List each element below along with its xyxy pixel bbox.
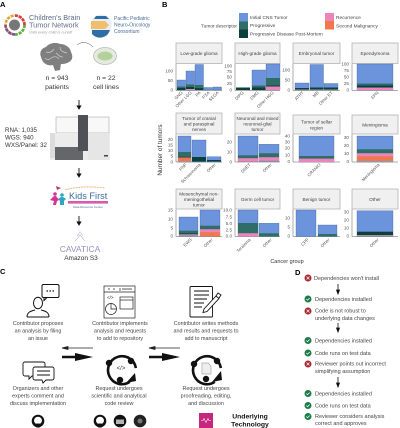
item: code runs on test data: Code runs on test data	[315, 351, 372, 357]
chart: embryonal tumor: 100	[282, 68, 290, 72]
chart: benign tumor	[285, 189, 340, 248]
icon: github 2	[94, 415, 106, 428]
chart: germ cell tumor: 0.0	[226, 234, 232, 239]
panel C: contribution workflow	[0, 267, 269, 428]
chart: germ cell tumor: Other	[262, 237, 273, 248]
panel letter C: C	[0, 267, 6, 276]
chart: low-grade glioma: Low-grade glioma	[180, 51, 218, 56]
chart: meningioma: 10	[344, 151, 349, 156]
chart: neuronal and mixed neuronal-glial tumor	[227, 113, 280, 174]
chart: tumor of cranial and paraspinal nerves	[168, 113, 222, 184]
logo: Children's Brain Tumor Network: Children's Brain	[29, 13, 80, 22]
chart: meningioma: 30	[344, 135, 349, 140]
chart: benign tumor: 10	[285, 215, 290, 220]
chart: high-grade glioma: DMG	[249, 90, 260, 101]
chart: high-grade glioma: 0	[229, 88, 232, 92]
chart: germ cell tumor: Germ cell tumor	[241, 197, 275, 202]
text: contributor writes: and results and requests to	[173, 328, 239, 334]
text: code review: scientific and analytical	[91, 394, 147, 400]
item: dependencies installed	[304, 390, 372, 398]
chart: tumor of cranial and paraspinal nerves: and paraspinal	[184, 122, 214, 126]
item: code runs on test data: Code runs on test data	[315, 403, 372, 409]
text: contributor writes: Contributor writes methods	[174, 321, 239, 327]
chart: high-grade glioma: 50	[227, 74, 232, 80]
arrow	[336, 377, 340, 387]
chart: mesenchymal non-meningothelial tumor: tumor	[193, 202, 205, 208]
legend	[201, 13, 378, 38]
sequencing counts: WGS: 940	[5, 134, 34, 142]
chart: other: 30	[344, 209, 349, 214]
text: code review	[91, 386, 147, 407]
text: contributor implements	[92, 321, 148, 342]
text: organizers comment: Organizers and other	[13, 386, 64, 392]
chart: other	[344, 189, 398, 248]
logo: Children's Brain Tumor Network: Until every child is cured!	[29, 30, 73, 34]
text: organizers comment	[10, 386, 66, 407]
chart: ependymoma: EPN	[370, 90, 380, 100]
chart: germ cell tumor: 10.0	[223, 208, 232, 213]
item: dependencies installed: Dependencies installed	[315, 297, 372, 303]
chart: tumor of sellar region: 0	[287, 159, 290, 164]
chart: benign tumor: Other	[320, 237, 331, 248]
chart: neuronal and mixed neuronal-glial tumor: DNET	[240, 162, 252, 174]
chart: germ cell tumor: 7.5	[226, 215, 232, 220]
arrow	[336, 284, 340, 294]
panel letter D: D	[295, 268, 301, 277]
chart: low-grade glioma: 0	[170, 88, 173, 92]
text: proofreading: Request undergoes	[182, 386, 230, 392]
chart: low-grade glioma: PXA	[201, 90, 211, 100]
item: dependencies installed	[304, 296, 372, 303]
text: underlying technology	[231, 414, 269, 428]
chart: tumor of sellar region: 30	[285, 140, 290, 145]
text: underlying technology: Underlying	[232, 414, 268, 420]
logo: Cavatica	[60, 232, 101, 262]
chart: mesenchymal non-meningothelial tumor: 0	[170, 234, 173, 239]
panel B: tumor bar charts	[157, 0, 398, 265]
text: contributor proposes: Contributor proposes	[13, 321, 63, 327]
chart: low-grade glioma: Other LGG	[174, 90, 193, 109]
icon: document and pencil	[190, 286, 221, 317]
text: contributor proposes	[13, 321, 63, 342]
chart: tumor of sellar region: 40	[285, 133, 290, 138]
chart: neuronal and mixed neuronal-glial tumor: neuronal-glial	[243, 122, 272, 126]
chart: other: 10	[344, 226, 349, 231]
chart: tumor of cranial and paraspinal nerves: nerves	[192, 127, 207, 132]
chart: neuronal and mixed neuronal-glial tumor: 10	[227, 149, 232, 154]
chart: meningioma: 20	[344, 143, 349, 148]
item: dependencies installed	[304, 337, 372, 344]
text: code review: Request undergoes	[95, 386, 143, 392]
chart: tumor of sellar region: 10	[285, 153, 290, 158]
panel A: data collection workflow	[0, 0, 151, 262]
sequencing counts	[5, 127, 48, 149]
legend: Progressive Disease Post-Mortem	[250, 32, 323, 38]
cell line label: cell lines	[93, 84, 120, 91]
item: reviewer points out assumption	[304, 360, 386, 375]
chart: ependymoma: Ependymoma	[361, 51, 390, 56]
logo: Pacific Pediatric Neuro-Oncology Consortium: Consortium	[114, 29, 140, 35]
text: contributor proposes: an analysis by filing	[15, 328, 61, 334]
icon: github 1	[32, 415, 44, 428]
chart: tumor of sellar region: region	[310, 126, 323, 130]
logo: Pacific Pediatric Neuro-Oncology Consortium: Pacific Pediatric	[114, 16, 150, 22]
chart: tumor of sellar region: 20	[285, 146, 290, 151]
item: code runs on test data	[304, 350, 372, 357]
chart: other: 0	[346, 234, 349, 239]
icon: code window: </>	[107, 295, 114, 300]
logo: Cavatica: Amazon S3	[64, 255, 98, 262]
chart: meningioma: Meningioma	[362, 122, 388, 128]
chart: meningioma: 0	[346, 159, 349, 164]
chart: other: 20	[344, 218, 349, 223]
item: reviewer approves: Reviewer considers analysis	[315, 414, 385, 420]
chart: embryonal tumor: 0	[287, 88, 290, 92]
text: contributor proposes: an issue	[28, 336, 48, 342]
chart: tumor of cranial and paraspinal nerves: 5	[170, 153, 173, 158]
chart: mesenchymal non-meningothelial tumor: 5	[170, 225, 173, 230]
chart: embryonal tumor: Embryonal tumor	[299, 51, 335, 56]
arrow: thin back arrow 2	[149, 346, 180, 350]
icon: underlying technology square	[199, 413, 213, 428]
chart: tumor of cranial and paraspinal nerves: 0	[170, 159, 173, 164]
y axis title: Number of tumors	[157, 124, 164, 176]
chart: mesenchymal non-meningothelial tumor: Other	[203, 237, 214, 248]
logo: Kids First Data Resource Center: Kids First	[69, 191, 108, 201]
text: contributor writes: add to manuscript	[185, 336, 228, 342]
sequencing counts: RNA: 1,035	[5, 127, 38, 134]
arrow	[77, 216, 81, 225]
chart: neuronal and mixed neuronal-glial tumor: Other	[262, 162, 273, 173]
chart: embryonal tumor: 50	[285, 78, 290, 82]
arrow: thick forward arrow 1	[62, 353, 93, 361]
chart: benign tumor: Benign tumor	[303, 197, 331, 202]
chart: other: Other	[369, 237, 380, 248]
chart: mesenchymal non-meningothelial tumor: 10	[168, 217, 173, 222]
chart: high-grade glioma: DIPG	[234, 90, 245, 101]
chart: low-grade glioma: 100	[165, 68, 173, 74]
chart: ependymoma	[341, 43, 398, 100]
x axis title: Cancer group	[270, 259, 304, 265]
chart: ependymoma: 25	[344, 81, 349, 86]
chart: neuronal and mixed neuronal-glial tumor: 20	[227, 139, 232, 144]
chart: high-grade glioma: 75	[227, 69, 232, 74]
icon: curved arrow from brain to cell dish	[77, 43, 93, 47]
chart: high-grade glioma: 100	[224, 64, 232, 68]
icon: sequencing machine	[50, 115, 110, 160]
item: code is not robust: underlying data changes	[315, 316, 375, 322]
chart: benign tumor: 5	[287, 224, 290, 229]
chart: ependymoma: 0	[346, 88, 349, 92]
chart: mesenchymal non-meningothelial tumor	[168, 189, 222, 248]
legend: Second Malignancy	[336, 24, 378, 30]
chart: high-grade glioma: High-grade glioma	[238, 51, 277, 56]
logo: Children's Brain Tumor Network	[6, 13, 80, 34]
chart: low-grade glioma: SEGA	[208, 90, 220, 102]
sequencing counts: WXS/Panel: 32	[5, 142, 48, 149]
chart: meningioma: Meningioma	[361, 162, 381, 182]
text: organizers comment: discuss implementation	[10, 401, 66, 407]
chart: embryonal tumor: Other ET	[318, 90, 334, 106]
chart: tumor of cranial and paraspinal nerves: Tumor of cranial	[182, 116, 216, 121]
arrow: thin back arrow 1	[62, 346, 93, 350]
chart: other: Other	[369, 197, 381, 202]
text: code review: code review	[105, 401, 133, 407]
icon: brain	[40, 43, 72, 71]
panel letter A: A	[0, 0, 6, 9]
chart: germ cell tumor: Teratoma	[235, 237, 252, 253]
legend: Initial CNS Tumor	[250, 15, 288, 21]
chart: ependymoma: 75	[344, 68, 349, 73]
chart: embryonal tumor	[282, 43, 340, 106]
legend: Recurrence	[336, 15, 361, 21]
item: dependencies installed: Dependencies installed	[315, 392, 372, 398]
chart: embryonal tumor: MB	[312, 90, 320, 98]
item: reviewer approves	[304, 413, 385, 427]
item: reviewer points out assumption: Reviewer points out incorrect	[315, 362, 386, 368]
chart: germ cell tumor	[223, 189, 280, 253]
chart: mesenchymal non-meningothelial tumor: 15	[168, 208, 173, 213]
chart: tumor of sellar region	[285, 115, 340, 178]
item: code runs on test data	[304, 402, 372, 409]
logo: Cavatica: CAVATICA	[60, 244, 101, 254]
item: code is not robust: Code is not robust to	[315, 308, 366, 314]
text: contributor implements: analysis and requests	[94, 328, 146, 334]
text: proofreading	[181, 386, 232, 407]
text: proofreading: proofreading, editing,	[181, 394, 232, 400]
arrow	[77, 100, 81, 109]
item: dependencies won't install	[304, 274, 379, 282]
arrow	[77, 168, 81, 177]
chart: tumor of cranial and paraspinal nerves: 20	[168, 137, 173, 142]
legend: Progressive	[250, 23, 276, 29]
chart: tumor of cranial and paraspinal nerves: PNF	[178, 162, 188, 172]
chart: low-grade glioma	[165, 43, 222, 109]
text: contributor implements: to add to repository	[97, 336, 143, 342]
icon: chat bubbles	[23, 362, 54, 383]
chart: neuronal and mixed neuronal-glial tumor: 0	[229, 159, 232, 164]
chart: meningioma	[344, 115, 398, 182]
chart: germ cell tumor: 5.0	[226, 221, 232, 226]
chart: low-grade glioma: GNG	[173, 90, 184, 101]
chart: benign tumor: 0	[287, 233, 290, 238]
logo: Children's Brain Tumor Network: Tumor Network	[29, 20, 79, 30]
chart: low-grade glioma: 50	[168, 78, 173, 83]
icon: person with speech bubble	[27, 284, 59, 317]
chart: neuronal and mixed neuronal-glial tumor: tumor	[252, 127, 264, 132]
logo: Pacific Pediatric Neuro-Oncology Consortium	[90, 14, 151, 38]
text: proofreading: and discussion	[188, 401, 224, 407]
chart: low-grade glioma: PA	[194, 90, 202, 98]
chart: mesenchymal non-meningothelial tumor: Mesenchymal non-	[179, 192, 219, 196]
item: dependencies won't install: Dependencies won't install	[314, 276, 379, 282]
panel letter B: B	[162, 0, 168, 9]
text: contributor writes	[173, 321, 239, 342]
chart: ependymoma: 100	[341, 62, 349, 66]
logo: Pacific Pediatric Neuro-Oncology Consortium: Neuro-Oncology	[114, 22, 151, 28]
chart: high-grade glioma: 25	[227, 81, 232, 86]
chart: mesenchymal non-meningothelial tumor: meningothelial	[184, 197, 214, 202]
chart: tumor of cranial and paraspinal nerves: Schwannoma	[180, 162, 202, 184]
chart: embryonal tumor: ATRT	[294, 90, 305, 101]
arrow	[336, 323, 340, 332]
logo: Kids First Data Resource Center: Data Resource Center	[73, 205, 103, 209]
chart: ependymoma: 50	[344, 74, 349, 80]
cell line count: n = 22	[96, 75, 116, 82]
icon: code review cycle: </>	[117, 366, 126, 372]
chart: tumor of cranial and paraspinal nerves: 15	[168, 143, 173, 148]
icon: docker-like badge	[114, 415, 126, 427]
item: reviewer points out assumption: simplifying assumption	[315, 369, 370, 375]
icon: cell culture dish	[94, 48, 116, 64]
patients count: n = 943	[46, 75, 69, 82]
icon: code window	[104, 286, 135, 318]
panel D: review outcomes	[295, 268, 386, 427]
chart: germ cell tumor: 2.5	[226, 228, 232, 233]
icon: proofreading cycle	[189, 352, 223, 388]
chart: tumor of sellar region: Tumor of sellar	[301, 120, 332, 124]
chart: tumor of cranial and paraspinal nerves: Other	[206, 162, 217, 173]
item: reviewer approves: correct and approves	[315, 421, 367, 427]
logo: Kids First Data Resource Center	[50, 186, 108, 209]
patients label: patients	[45, 84, 70, 91]
legend: Tumor descriptor	[201, 24, 237, 30]
text: organizers comment: experts comment and	[12, 394, 64, 400]
icon: ci badge	[134, 415, 146, 427]
item: dependencies installed: Dependencies installed	[315, 338, 372, 344]
chart: neuronal and mixed neuronal-glial tumor: Neuronal and mixed	[237, 116, 279, 121]
arrow: thick forward arrow 2	[149, 353, 180, 361]
text: contributor implements: Contributor implements	[92, 321, 148, 327]
chart: tumor of cranial and paraspinal nerves: 10	[168, 148, 173, 153]
chart: benign tumor: CPP	[300, 237, 310, 247]
chart: tumor of sellar region: CRANIO	[306, 162, 322, 178]
chart: high-grade glioma	[224, 43, 280, 109]
icon: code review cycle	[104, 352, 138, 388]
chart: mesenchymal non-meningothelial tumor: EWS	[182, 237, 193, 248]
item: code is not robust	[304, 308, 375, 322]
chart: high-grade glioma: Other HGG	[256, 90, 275, 109]
